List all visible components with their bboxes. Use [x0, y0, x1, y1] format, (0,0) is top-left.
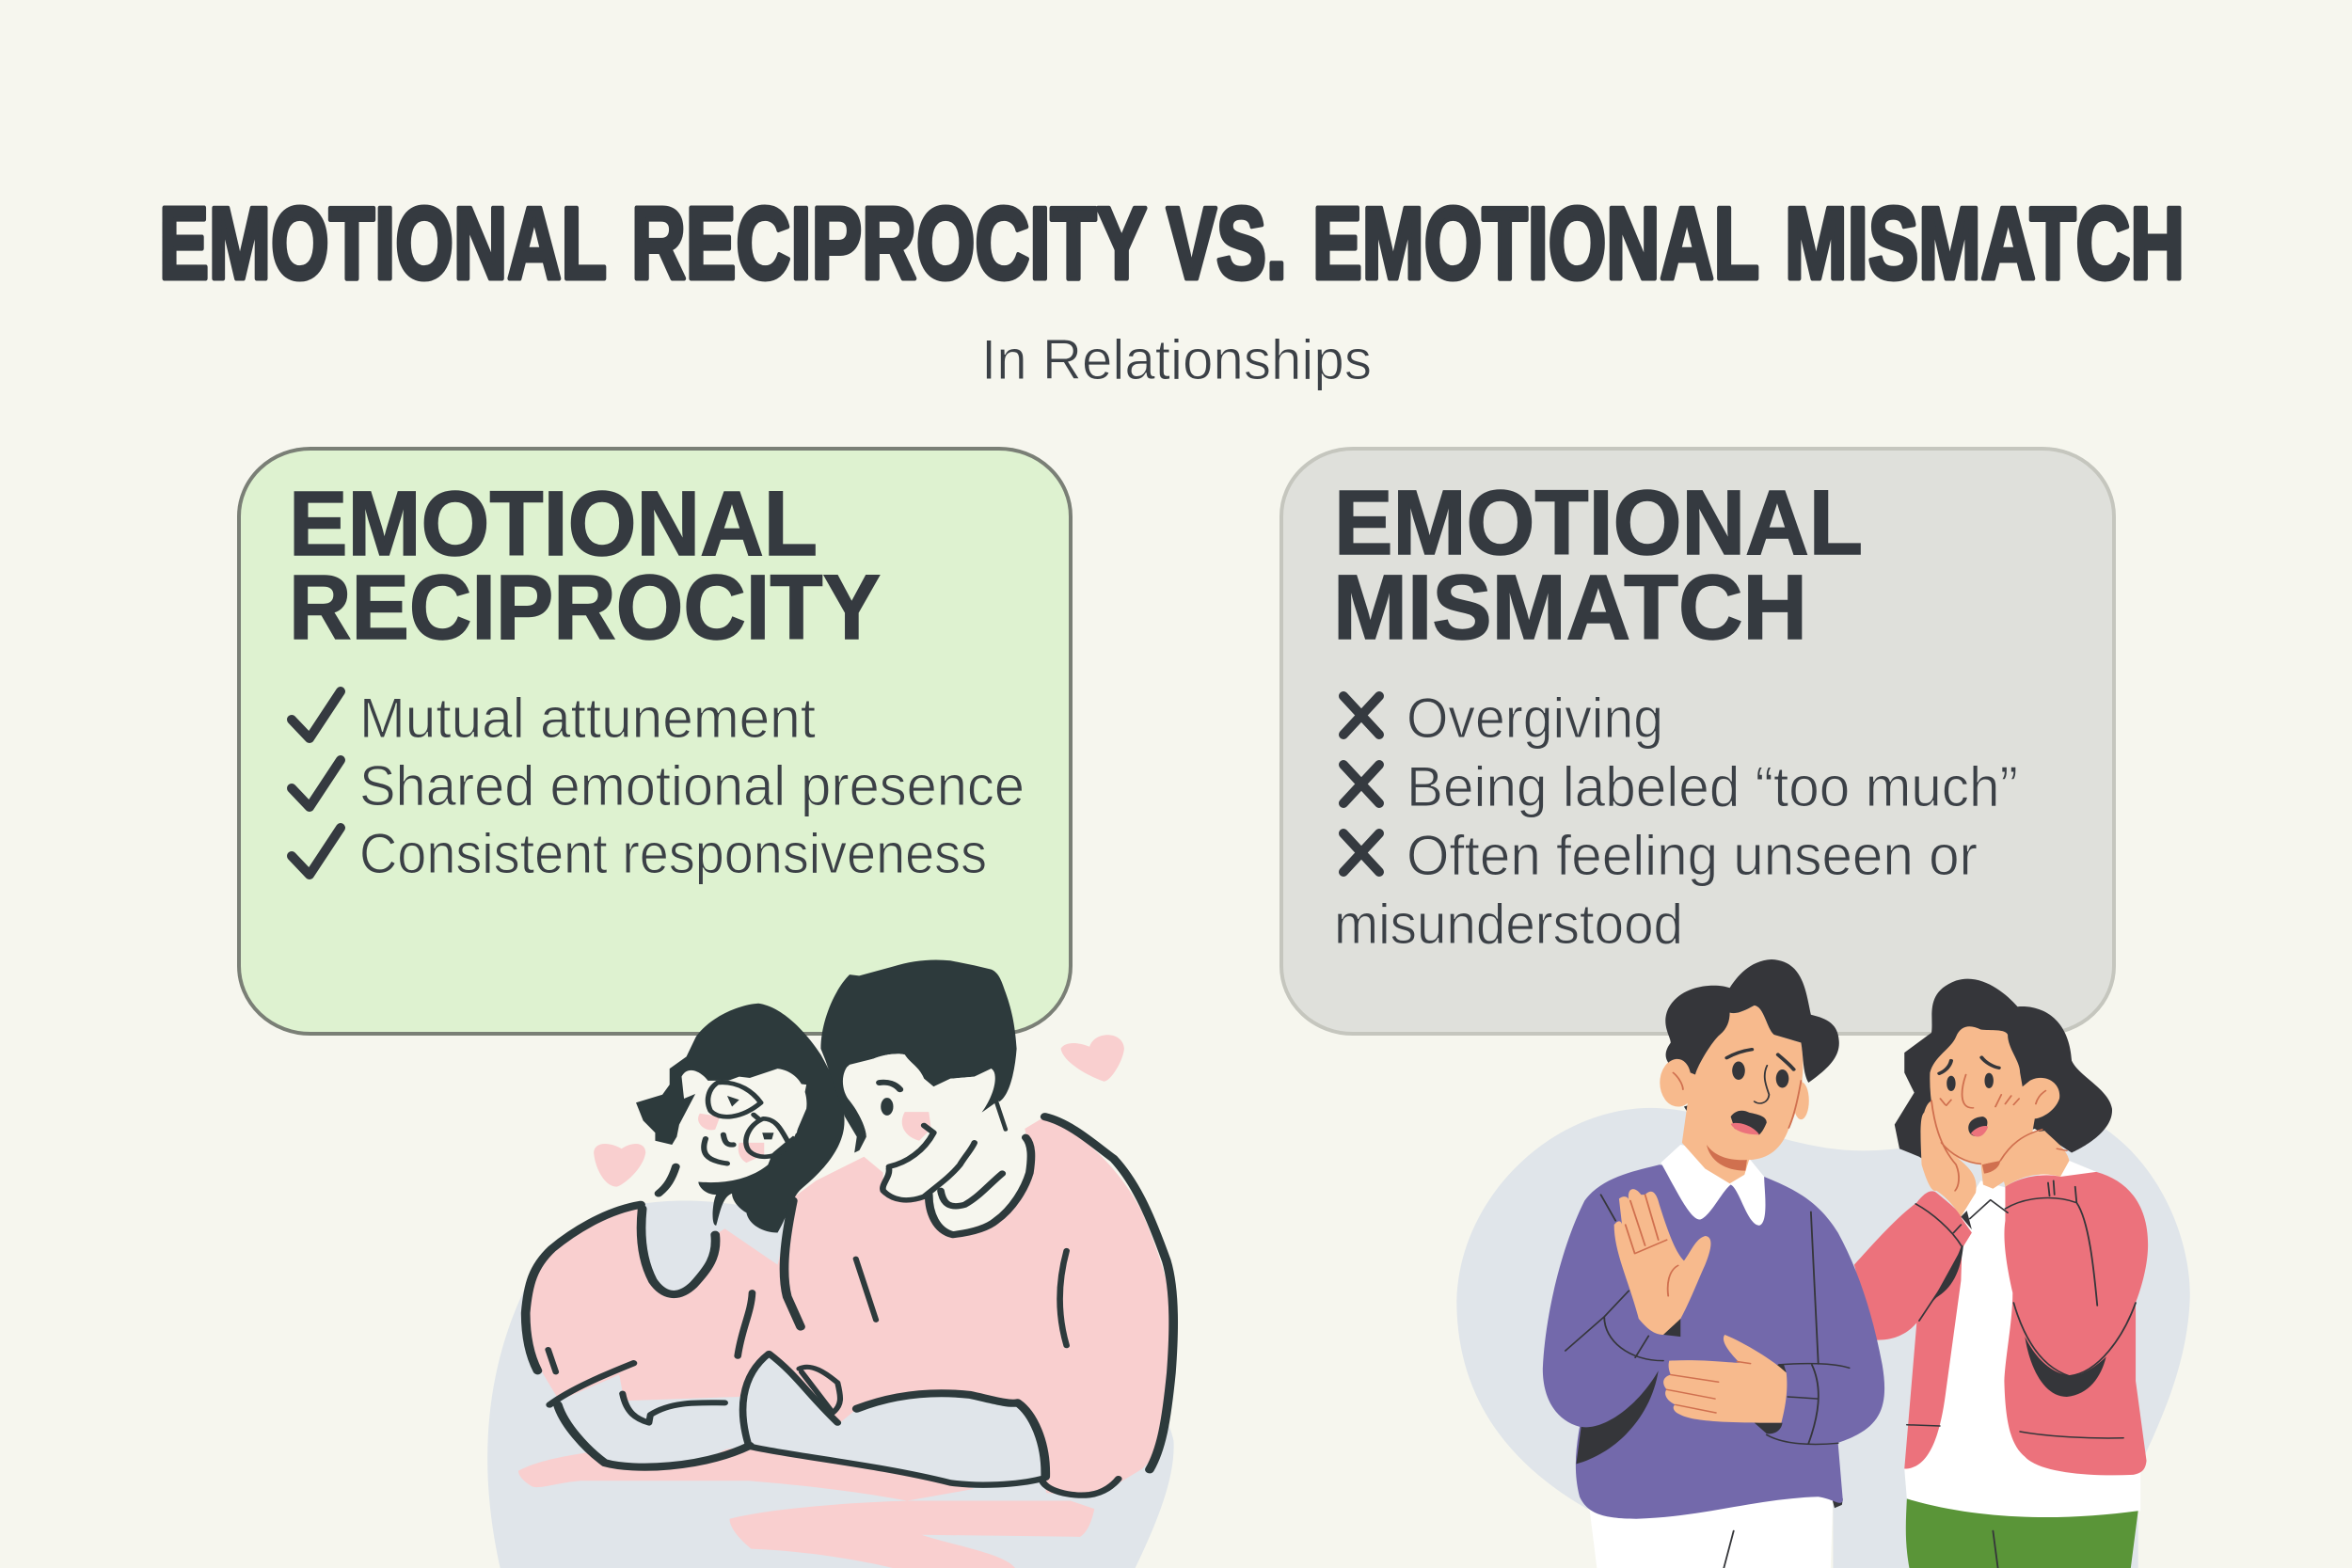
background blob	[1456, 1108, 2190, 1568]
heading: emotional mismatch	[1333, 471, 1863, 658]
outlines	[526, 1083, 1173, 1496]
list: mismatch traits: Being labeled “too much”	[1406, 755, 2018, 818]
woman's sweater	[525, 1205, 806, 1401]
title: EMOTIONAL	[1312, 186, 1759, 301]
floor shapes	[518, 1445, 1094, 1568]
list: mismatch traits	[1334, 687, 2018, 956]
illustration: happy couple	[487, 959, 1174, 1568]
list: reciprocity traits	[359, 687, 1025, 885]
icons: cross marks	[1343, 696, 1379, 872]
heading: emotional reciprocity	[289, 472, 881, 658]
list: mismatch traits: misunderstood	[1334, 893, 1683, 956]
title: MISMATCH	[1785, 186, 2185, 301]
list: mismatch traits: Often feeling unseen or	[1406, 824, 1978, 887]
figure: man	[1543, 959, 1884, 1568]
title: VS.	[1167, 186, 1287, 301]
panel: emotional reciprocity	[239, 449, 1071, 1034]
man's sweater	[768, 1118, 1173, 1497]
heading: emotional mismatch: MISMATCH	[1333, 556, 1807, 658]
title: RECIPROCITY	[631, 186, 1147, 301]
title: EMOTIONAL	[159, 186, 607, 301]
icon: heart left	[594, 1144, 645, 1187]
heading: emotional reciprocity: EMOTIONAL	[289, 472, 818, 575]
subtitle: In Relationships	[981, 328, 1372, 391]
panel: emotional mismatch	[1281, 449, 2114, 1034]
background blob	[487, 1201, 1174, 1568]
heading: emotional reciprocity: RECIPROCITY	[289, 556, 881, 658]
icons: check marks	[292, 691, 341, 875]
sleeves	[559, 1353, 1046, 1482]
list: reciprocity traits: Consistent responsiveness	[359, 822, 987, 885]
glasses and woman's features	[659, 1083, 789, 1194]
icon: heart right	[1061, 1035, 1124, 1082]
list: mismatch traits: Overgiving	[1406, 687, 1663, 750]
cheeks	[698, 1112, 931, 1163]
hair and faces	[636, 959, 1032, 1235]
list: reciprocity traits: Shared emotional presence	[359, 754, 1025, 817]
figure: woman	[1854, 979, 2148, 1568]
heading: emotional mismatch: EMOTIONAL	[1334, 471, 1863, 574]
title	[159, 186, 2185, 301]
illustration: distressed pair	[1456, 959, 2190, 1568]
list: reciprocity traits: Mutual attunement	[359, 687, 816, 750]
